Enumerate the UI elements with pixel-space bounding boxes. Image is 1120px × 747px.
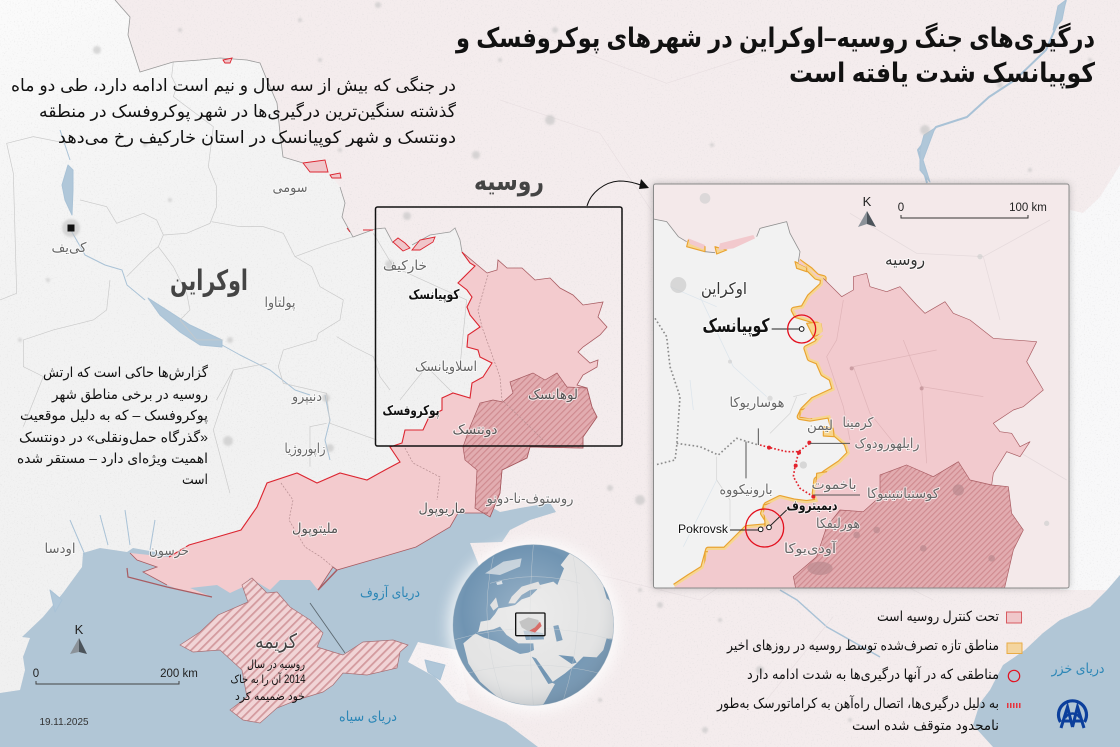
scale bar: main map: 0: [33, 668, 39, 680]
city labels: main map: دونتسک: [452, 422, 498, 438]
Crimea label and note: روسیه در سال: [247, 659, 305, 672]
city labels: main map: زاپوروژیا: [284, 441, 326, 457]
legend: fighting circle: [1008, 670, 1020, 682]
inset labels: [678, 252, 940, 557]
city labels: main map: کی‌یف: [52, 240, 87, 255]
globe: [448, 540, 627, 712]
hatched area: [793, 462, 1023, 593]
sea labels: دریای آزوف: [360, 584, 420, 601]
Taman and Krasnodar pale coast: [408, 642, 470, 702]
city labels: main map: [44, 180, 578, 559]
legend: [716, 608, 1022, 734]
intro text block: دونتسک و شهر کوپیانسک در استان خارکیف رخ می‌دهد: [58, 128, 456, 148]
north arrow: main map: [70, 622, 87, 654]
icon: AA logo: [1058, 701, 1086, 728]
Crimea label and note: 2014 آن را به خاک: [230, 672, 306, 687]
inset labels: کرمینا: [842, 415, 874, 431]
sea labels: [339, 584, 1104, 725]
city labels: main map: اودسا: [44, 541, 76, 557]
intro text block: [11, 75, 457, 148]
city labels: main map: خرسون: [149, 543, 189, 559]
city labels: main map: ملیتوپول: [292, 521, 338, 537]
globe waters: [475, 587, 613, 684]
globe graticule: [453, 545, 613, 705]
east and coast boundary line: [130, 252, 607, 590]
city labels: main map: پوکروفسک: [382, 403, 440, 418]
city labels: main map: ماریوپول: [418, 501, 466, 517]
legend: recently seized swatch: [1007, 643, 1022, 654]
inset labels: رایلهورودوک: [854, 436, 920, 452]
side text block: [17, 364, 208, 487]
legend: تحت کنترل روسیه است: [877, 608, 999, 625]
fighting circles: [746, 315, 816, 547]
side text block: «گذرگاه حمل‌ونقلی» در دونتسک: [19, 429, 208, 446]
inset scale bar: 0: [898, 202, 904, 214]
occupied area: [670, 262, 1043, 593]
inset north arrow: K: [863, 194, 872, 209]
legend: مناطقی که در آنها درگیری‌ها به شدت ادامه دارد: [747, 666, 999, 683]
inset labels: اوکراین: [701, 281, 747, 299]
hatched area: Donetsk and Luhansk: [463, 373, 597, 517]
sea labels: دریای خزر: [1051, 661, 1104, 677]
city labels: main map: سومی: [272, 180, 308, 196]
city labels: main map: لوهانسک: [528, 387, 578, 403]
inset map drawing: [650, 193, 1067, 593]
legend: مناطق تازه تصرف‌شده توسط روسیه در روزهای اخیر: [726, 637, 999, 654]
pockets on northern border: [688, 235, 807, 267]
globe land: [463, 554, 614, 706]
inset north arrow: [858, 194, 876, 227]
inset labels: بارونیکووه: [720, 482, 772, 498]
Crimea label and note: [230, 631, 306, 704]
inset labels: لیمن: [807, 418, 833, 434]
occupied territory: southern and eastern Ukraine: [127, 252, 607, 597]
inset labels: روسیه: [885, 252, 925, 270]
legend: نامحدود متوقف شده است: [852, 717, 999, 734]
Caspian Sea: [973, 575, 1120, 747]
recently seized areas (front band): [675, 240, 850, 587]
city labels: main map: پولتاوا: [264, 295, 296, 311]
occupied border pockets: [223, 58, 435, 251]
panel: inset map: [650, 184, 1069, 593]
oblast borders and roads: [0, 33, 933, 700]
legend: occupied swatch: [1006, 612, 1022, 623]
city labels: main map: اسلاویانسک: [415, 359, 477, 375]
inset labels: دیمیتروف: [786, 498, 838, 513]
city labels: main map: دنیپرو: [291, 389, 322, 405]
spit on Black Sea coast: [127, 568, 212, 597]
inset labels: آودی‌یوکا: [784, 540, 837, 557]
land: Ukraine, Belarus and neighbours: [0, 0, 492, 693]
inset labels: Pokrovsk: [678, 522, 729, 536]
Black Sea and Sea of Azov: [0, 503, 556, 747]
globe locator: Ukraine with occupied zone: [516, 613, 545, 636]
leader lines: [730, 329, 860, 530]
inset labels: کوپیانسک: [702, 316, 770, 337]
arrow to inset: [587, 179, 649, 206]
legend: railway hatch: [1007, 703, 1022, 708]
inset scale bar: [898, 202, 1047, 218]
side text block: گزارش‌ها حاکی است که ارتش: [43, 364, 208, 381]
front line: [169, 252, 492, 557]
north arrow: main map: K: [75, 622, 84, 637]
scale bar: main map: 200 km: [160, 668, 198, 680]
Crimea label and note: خود ضمیمه کرد: [235, 691, 305, 704]
inset labels: باخموت: [812, 477, 856, 493]
land: Kazakhstan: [1060, 165, 1120, 590]
side text block: پوکروفسک – که به دلیل موقعیت: [20, 407, 208, 424]
intro text block: در جنگی که بیش از سه سال و نیم است ادامه دارد، طی دو ماه: [11, 75, 456, 96]
inset labels: کوستیانتینیوکا: [867, 486, 940, 502]
title: [454, 22, 1095, 89]
country label: Russia: روسیه: [474, 166, 544, 197]
city labels: main map: خارکیف: [383, 258, 427, 274]
sea labels: دریای سیاه: [339, 709, 397, 725]
intro text block: گذشته سنگین‌ترین درگیری‌ها در شهر پوکروفسک در منطقه: [39, 101, 457, 122]
locator box on main map: [376, 207, 622, 446]
side text block: است: [182, 471, 208, 487]
oblast borders inside occupied zone: [281, 275, 543, 567]
side text block: اهمیت ویژه‌ای دارد – مستقر شده: [17, 450, 208, 467]
scale bar: main map: [33, 668, 198, 684]
icon: Kyiv capital marker: [68, 224, 74, 232]
country label: Ukraine: اوکراین: [170, 265, 248, 297]
railway disruption: dotted lines: [655, 318, 813, 497]
Ukraine international border line: [115, 0, 462, 252]
date: 19.11.2025: [40, 716, 89, 728]
inset scale bar: 100 km: [1009, 202, 1047, 214]
Crimea: [180, 570, 408, 723]
Crimea label and note: کریمه: [255, 631, 297, 653]
side text block: روسیه در برخی مناطق شهر: [51, 386, 208, 403]
city labels: main map: کوپیانسک: [408, 287, 460, 302]
legend: به دلیل درگیری‌ها، اتصال راه‌آهن به کراماتورسک به‌طور: [716, 695, 999, 712]
inset labels: هوساریوکا: [730, 395, 784, 411]
city labels: main map: روستوف-نا-دونو: [486, 491, 574, 507]
inset labels: هورلیفکا: [816, 516, 860, 532]
